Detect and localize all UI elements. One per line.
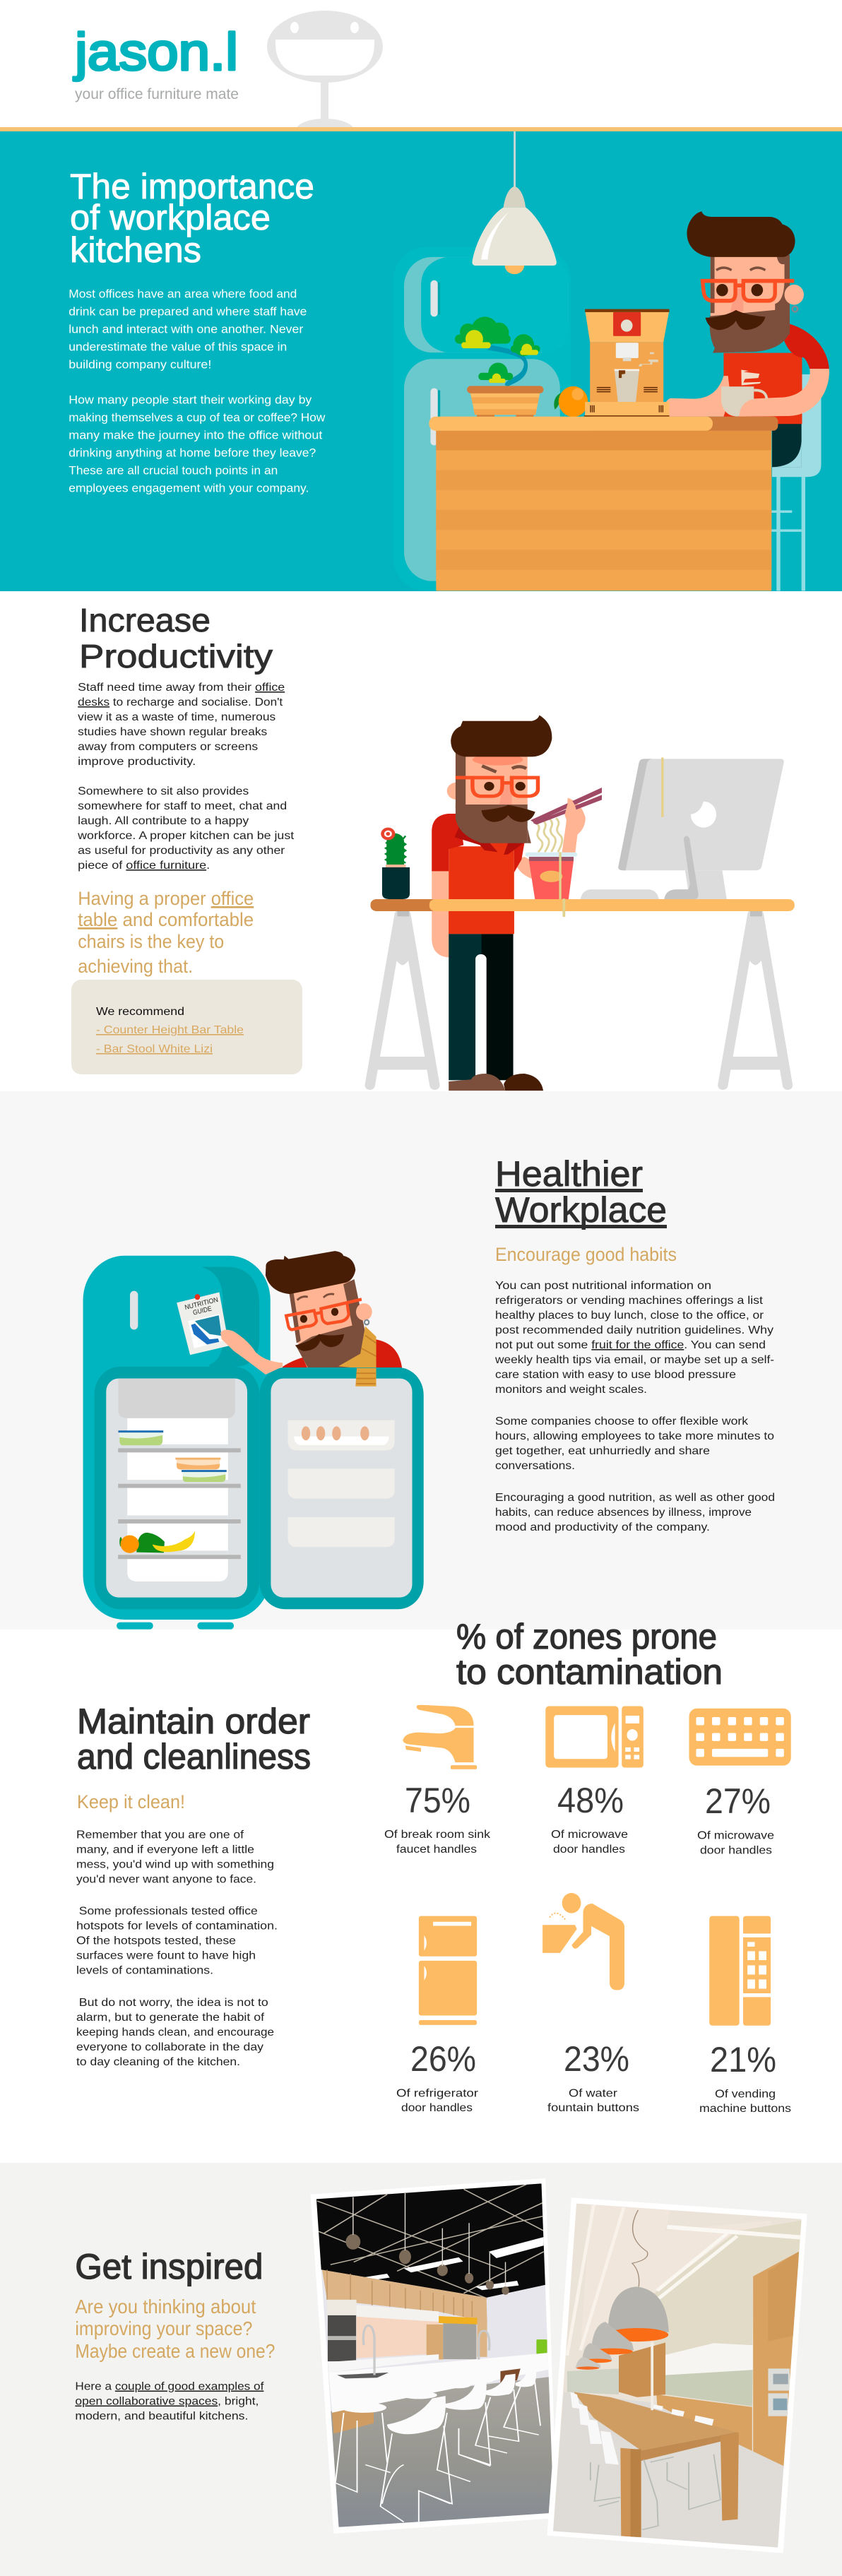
icon: keyboard — [689, 1709, 791, 1766]
hero body text: Most offices have an area where food and — [69, 287, 297, 301]
body text: laugh. All contribute to a happy — [78, 815, 249, 827]
body text: levels of contaminations. — [76, 1965, 213, 1976]
section heading: Workplace — [495, 1190, 667, 1230]
subheading: Keep it clean! — [77, 1791, 185, 1812]
nutrition guide note: NUTRITION — [184, 1296, 219, 1311]
icon: refrigerator — [419, 1916, 477, 2025]
fruit on shelf — [119, 1531, 195, 1553]
stat: 27%: door handles — [700, 1845, 772, 1856]
icons grid — [403, 1705, 791, 2026]
noodles and cup — [526, 788, 602, 899]
pendant lamp — [472, 131, 557, 274]
body text: view it as a waste of time, numerous — [78, 711, 275, 723]
body text: Staff need time away from their office — [78, 682, 285, 694]
fridge feet — [117, 1622, 234, 1630]
hero body text — [69, 287, 326, 494]
hero body text: How many people start their working day by — [69, 393, 312, 407]
body text — [77, 682, 295, 872]
cactus plant — [381, 828, 410, 899]
stat: 21%: Of vending — [715, 2088, 776, 2101]
open door — [259, 1367, 424, 1609]
stat: 23%: 23% — [564, 2039, 629, 2079]
stat: 48% — [551, 1781, 628, 1856]
nutrition guide note — [177, 1293, 229, 1355]
body text: piece of office furniture . — [78, 860, 210, 872]
illustration: man at kitchen counter — [393, 131, 829, 591]
body text: Some companies choose to offer flexible work — [495, 1415, 749, 1428]
hero body text: drinking anything at home before they leave? — [69, 446, 316, 459]
orange subheading: Maybe create a new one? — [75, 2340, 275, 2362]
orange subheading — [75, 2296, 275, 2362]
section heading — [79, 602, 273, 675]
stat: 75%: Of break room sink — [384, 1829, 491, 1841]
illustration: man behind open fridge — [83, 1251, 424, 1630]
stat: 27% — [697, 1781, 774, 1856]
section heading: Increase — [79, 602, 210, 639]
body text: hours, allowing employees to take more minutes to — [495, 1430, 774, 1442]
desk right leg — [723, 911, 788, 1086]
chart heading: % of zones prone — [456, 1617, 717, 1656]
body text: You can post nutritional information on — [495, 1280, 711, 1292]
stat: 75%: 75% — [405, 1781, 470, 1820]
photos — [304, 2168, 807, 2553]
section heading: Maintain order — [77, 1702, 310, 1741]
body text: Somewhere to sit also provides — [78, 785, 249, 797]
panel: get inspired — [0, 2163, 842, 2576]
fridge body — [83, 1256, 271, 1620]
stat: 21%: machine buttons — [699, 2103, 791, 2115]
body text — [494, 1280, 775, 1533]
stat: 75%: faucet handles — [396, 1844, 477, 1856]
body text: open collaborative spaces , bright, — [75, 2396, 259, 2407]
recommendation box: - Bar Stool White Lizi — [96, 1043, 213, 1055]
panel: increase productivity — [71, 602, 795, 1091]
stat: 26%: door handles — [401, 2102, 473, 2114]
hero title — [70, 167, 314, 270]
body text: keeping hands clean, and encourage — [76, 2026, 274, 2038]
body text: improve productivity. — [78, 756, 196, 768]
recommendation box: We recommend — [96, 1006, 184, 1018]
orange fruit — [554, 386, 588, 417]
icon: microwave — [545, 1707, 644, 1767]
icon: person at water fountain — [542, 1893, 624, 1990]
fridge in background — [393, 247, 571, 591]
body text: many, and if everyone left a little — [76, 1844, 254, 1856]
man — [665, 211, 829, 467]
photo: long table with pendant lamps — [547, 2197, 807, 2553]
coffee machine — [584, 309, 670, 417]
body text — [76, 1829, 278, 2068]
body text: refrigerators or vending machines offerings a list — [495, 1295, 764, 1307]
hero body text: building company culture! — [69, 357, 211, 372]
stat: 48%: door handles — [553, 1844, 625, 1856]
hero body text: lunch and interact with one another. Never — [69, 322, 304, 336]
icon: faucet — [403, 1705, 477, 1769]
arm reaching to note — [220, 1330, 283, 1375]
body text: everyone to collaborate in the day — [76, 2041, 263, 2053]
hero title: The importance — [70, 167, 314, 206]
section heading — [495, 1154, 667, 1230]
body text: Of the hotspots tested, these — [76, 1935, 236, 1947]
body text: Here a couple of good examples of — [75, 2380, 264, 2393]
body text: alarm, but to generate the habit of — [76, 2012, 265, 2024]
stat: 23%: fountain buttons — [547, 2102, 639, 2114]
desk left leg — [370, 911, 434, 1086]
body text: mess, you'd wind up with something — [76, 1859, 274, 1870]
stat: 26%: Of refrigerator — [396, 2088, 479, 2099]
body text: healthy places to buy lunch, close to the office, or — [495, 1310, 764, 1322]
section heading: Healthier — [495, 1154, 643, 1194]
orange callout text: Having a proper office — [78, 888, 254, 909]
body text: habits, can reduce absences by illness, improve — [495, 1507, 752, 1519]
stat: 26% — [396, 2039, 479, 2114]
stat: 48%: Of microwave — [551, 1829, 628, 1841]
chart heading: to contamination — [456, 1652, 723, 1692]
monitor and keyboard — [581, 757, 784, 899]
body text: desks to recharge and socialise. Don't — [78, 696, 283, 708]
man body — [432, 716, 552, 1091]
logo tagline: your office furniture mate — [75, 86, 239, 102]
panel: hero — [0, 131, 842, 591]
logo wordmark: jason.l — [73, 23, 238, 81]
body text: Encouraging a good nutrition, as well as other good — [495, 1492, 775, 1504]
body text: to day cleaning of the kitchen. — [76, 2056, 240, 2068]
orange subheading: improving your space? — [75, 2317, 252, 2339]
body text: monitors and weight scales. — [495, 1384, 647, 1396]
orange callout text: table and comfortable — [78, 909, 254, 930]
icon: vending machine — [709, 1916, 771, 2026]
stat: 27%: Of microwave — [697, 1829, 774, 1842]
body text: studies have shown regular breaks — [78, 726, 267, 738]
body text: But do not worry, the idea is not to — [79, 1997, 268, 2009]
icon: chair watermark — [267, 11, 383, 127]
food containers — [118, 1430, 227, 1482]
orange callout text: chairs is the key to — [78, 931, 224, 952]
body text: as useful for productivity as any other — [78, 845, 285, 857]
orange callout text: achieving that. — [78, 956, 193, 977]
hero title: kitchens — [70, 230, 201, 270]
body text: post recommended daily nutrition guidelines. Why — [495, 1324, 773, 1336]
stat: 23%: Of water — [569, 2088, 618, 2099]
illustration: man eating noodles at desk — [370, 716, 795, 1091]
orange callout text — [78, 888, 254, 977]
stat: 27%: 27% — [705, 1781, 771, 1821]
chart heading — [456, 1617, 723, 1692]
stat: 21%: 21% — [710, 2040, 776, 2079]
section heading — [77, 1702, 311, 1776]
hero body text: many make the journey into the office without — [69, 428, 323, 442]
nutrition guide note: GUIDE — [192, 1305, 213, 1317]
body text: Remember that you are one of — [76, 1829, 244, 1841]
bonsai plant — [455, 316, 544, 417]
body text: modern, and beautiful kitchens. — [75, 2410, 248, 2423]
body text: workforce. A proper kitchen can be just — [77, 830, 295, 842]
hero body text: making themselves a cup of tea or coffee? How — [69, 411, 326, 424]
stat: 21% — [699, 2040, 791, 2115]
body text: Some professionals tested office — [79, 1906, 258, 1917]
recommendation box — [71, 980, 302, 1074]
man behind door — [266, 1251, 402, 1387]
body text: away from computers or screens — [78, 741, 258, 753]
kitchen counter — [429, 417, 778, 591]
section heading: Productivity — [79, 638, 273, 675]
subheading: Encourage good habits — [495, 1244, 677, 1265]
hero body text: employees engagement with your company. — [69, 482, 309, 494]
stool — [771, 374, 821, 591]
desk top — [371, 898, 795, 934]
body text: not put out some fruit for the office . You can send — [495, 1339, 766, 1351]
hero body text: These are all crucial touch points in an — [69, 463, 278, 477]
orange subheading: Are you thinking about — [75, 2296, 256, 2317]
section heading: and cleanliness — [77, 1737, 311, 1776]
body text: care station with easy to use blood pressure — [495, 1369, 736, 1381]
stat: 26%: 26% — [410, 2039, 476, 2079]
recommendation box: - Counter Height Bar Table — [96, 1024, 244, 1036]
body text: surfaces were fount to have high — [76, 1949, 256, 1962]
body text: weekly health tips via email, or maybe set up a self- — [494, 1354, 774, 1366]
body text: get together, eat unhurriedly and share — [495, 1445, 710, 1457]
photo: kitchen with bar stools — [311, 2178, 554, 2534]
orange divider band — [0, 127, 842, 131]
body text: mood and productivity of the company. — [495, 1521, 710, 1533]
stat: 75% — [384, 1781, 491, 1856]
body text: hotspots for levels of contamination. — [76, 1920, 278, 1933]
stat: 23% — [547, 2039, 639, 2114]
body text: conversations. — [495, 1460, 575, 1472]
body text: you'd never want anyone to face. — [76, 1873, 256, 1886]
body text — [75, 2380, 264, 2423]
panel: healthier workplace — [0, 1091, 842, 1630]
panel: header — [0, 11, 842, 131]
section heading: Get inspired — [75, 2247, 263, 2286]
hero body text: drink can be prepared and where staff have — [69, 305, 307, 318]
panel: maintain order and cleanliness — [76, 1617, 791, 2115]
body text: somewhere for staff to meet, chat and — [78, 800, 287, 812]
hero body text: underestimate the value of this space in — [69, 340, 287, 353]
hero title: of workplace — [70, 198, 271, 237]
stat: 48%: 48% — [557, 1781, 624, 1820]
